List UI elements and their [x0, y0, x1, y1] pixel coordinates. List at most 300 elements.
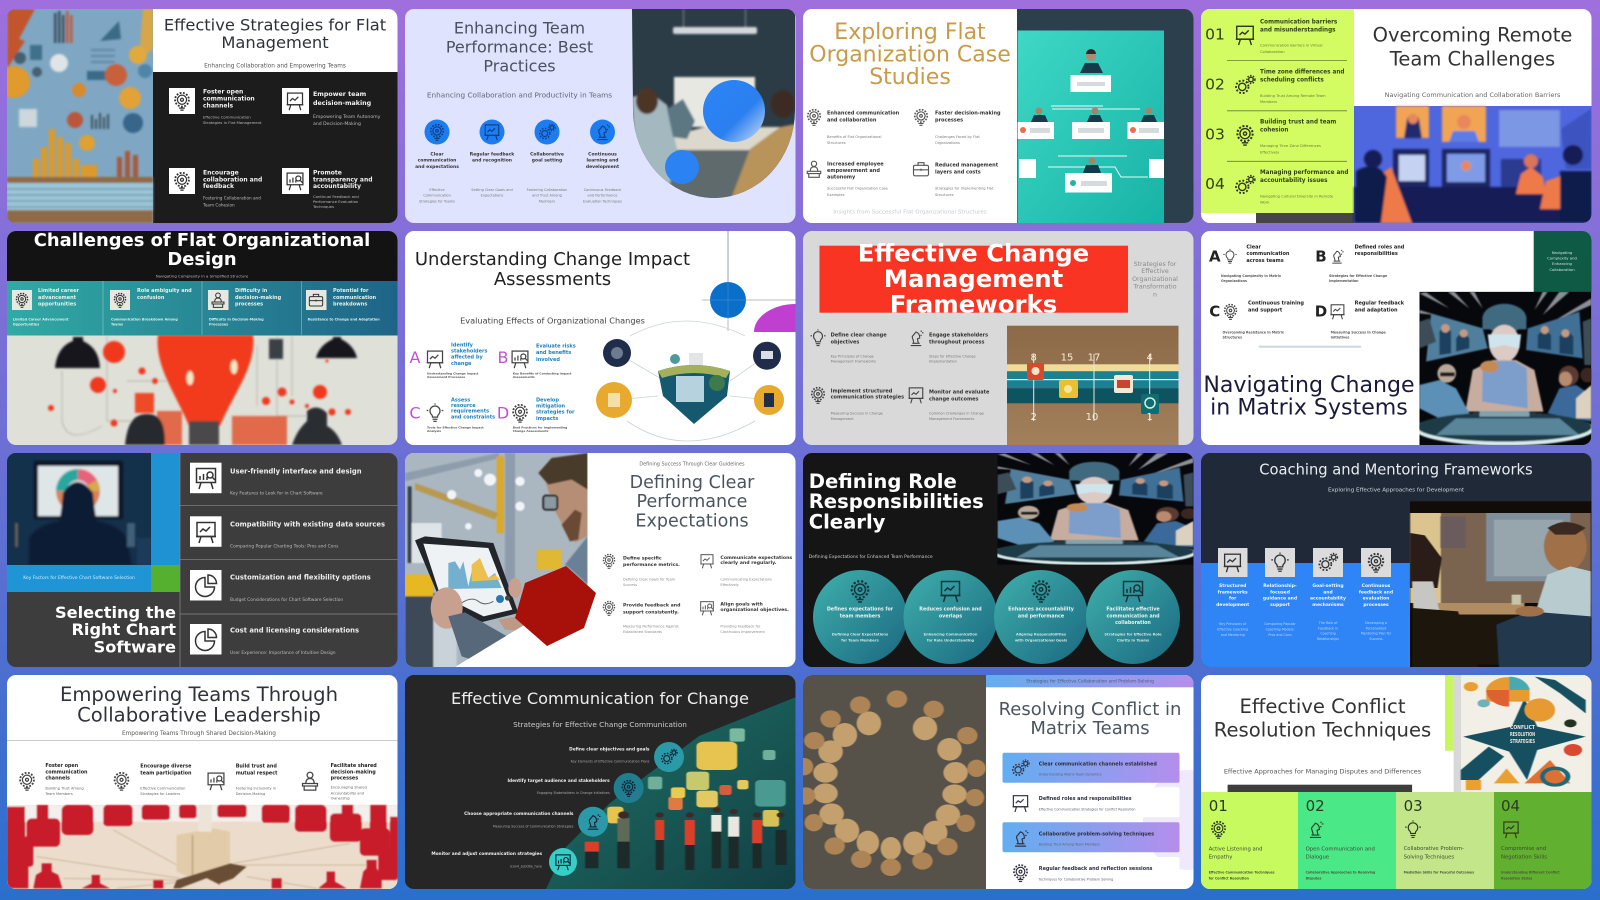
title: Performance: Best	[446, 38, 593, 56]
list text: channels	[45, 775, 70, 781]
ellipse text: and performance	[1018, 614, 1065, 620]
teal band of four columns: Communication Breakdown Among	[111, 318, 178, 322]
column text: and	[1323, 590, 1333, 596]
photo: holographic meeting	[1414, 292, 1595, 446]
subtitle: Effective Approaches for Managing Disputes and Differences	[1224, 768, 1422, 776]
subtitle: Strategies for Effective Change Communication	[513, 720, 687, 729]
timeline photo: 1	[1147, 412, 1153, 423]
list text: Decision-Making	[236, 792, 265, 796]
item text blocks: Continual Feedback and	[313, 194, 359, 199]
list text: Regular feedback	[1355, 301, 1405, 307]
title	[858, 238, 1089, 318]
title: Matrix Teams	[1030, 718, 1150, 739]
ellipse text: collaboration	[1115, 620, 1151, 626]
title: Challenges of Flat Organizational	[34, 230, 370, 251]
illustration: video call	[1354, 106, 1592, 223]
numbers	[1209, 797, 1520, 815]
column labels: development	[586, 164, 620, 170]
item text blocks: Empowering Team Autonomy	[313, 114, 381, 120]
title	[416, 252, 690, 286]
teal band of four columns: breakdowns	[333, 302, 367, 308]
item text blocks: communication	[203, 96, 255, 102]
photo: wooden pawns in a circle	[795, 675, 986, 889]
list text: impacts	[536, 416, 558, 422]
teal band of four columns: Potential for	[333, 288, 369, 294]
panel: Challenges of Flat Organizational Design	[7, 230, 398, 445]
side subtitle: Organizational	[1132, 276, 1178, 283]
list text: Key Elements of Effective Communication Plans	[571, 759, 650, 763]
icon tiles	[190, 463, 222, 654]
column labels: goal setting	[532, 158, 562, 164]
list text: Tools for Effective Change Impact	[427, 425, 484, 429]
list rows: Clear communication channels established	[1039, 761, 1157, 767]
list text: Managing Time Zone Differences	[1260, 144, 1321, 148]
item text blocks: Performance Evaluation	[313, 199, 359, 204]
column text: Coaching	[1320, 632, 1336, 636]
list text: throughout process	[929, 340, 984, 346]
dark bar	[1228, 785, 1412, 792]
item text blocks: Promote	[313, 170, 342, 176]
list text: Best Practices for Implementing	[513, 425, 567, 429]
list text: Identify target audience and stakeholders	[507, 778, 610, 784]
list text: performance metrics.	[623, 562, 680, 568]
item text: Challenges Faced by Flat	[935, 135, 980, 139]
title: Frameworks	[890, 290, 1057, 318]
panel: Selecting the Right Chart Software	[7, 453, 398, 667]
teal band of four columns: confusion	[137, 295, 165, 301]
row text: Comparing Popular Charting Tools: Pros and Cons	[230, 544, 339, 550]
title: Selecting the	[55, 603, 176, 622]
teal band of four columns: Opportunities	[13, 323, 39, 327]
list text: Building Trust Among	[45, 786, 84, 790]
column labels: Collaborative	[530, 152, 564, 158]
teal band of four columns: Processes	[209, 323, 228, 327]
list text: Managing performance and	[1260, 170, 1348, 176]
item text: Successful Flat Organization Case	[827, 186, 889, 190]
title: Exploring Flat	[834, 20, 986, 45]
column text: The Role of	[1318, 621, 1338, 625]
item text blocks: and Decision-Making	[313, 121, 361, 127]
item text blocks: feedback	[203, 183, 235, 190]
list text: Success	[623, 583, 637, 587]
title: Assessments	[494, 269, 611, 290]
list text: Provide feedback and	[623, 602, 680, 608]
list text: Work	[1260, 200, 1270, 204]
ellipse text: Defining Clear Expectations	[832, 632, 888, 636]
column text: Success	[1369, 637, 1383, 641]
item text blocks: collaboration and	[203, 176, 262, 184]
side subtitle: Strategies for	[1134, 261, 1177, 268]
column labels: Regular feedback	[470, 152, 515, 158]
column captions: and Performance	[588, 194, 617, 198]
list text: change outcomes	[929, 397, 979, 403]
item text blocks: Team Cohesion	[202, 202, 235, 208]
numbers: 02	[1306, 797, 1325, 815]
item text: Examples	[827, 193, 845, 197]
row text: Budget Considerations for Chart Software Selection	[230, 597, 343, 603]
side subtitle: Effective	[1141, 268, 1169, 275]
title: Right Chart	[71, 620, 176, 639]
ellipse text	[827, 606, 1162, 643]
list text: Overcoming Resistance in Matrix	[1222, 330, 1285, 334]
column text: Effective Coaching	[1217, 627, 1248, 631]
title	[55, 603, 176, 656]
item text blocks: Foster open	[203, 88, 243, 96]
side subtitle: n	[1153, 292, 1157, 298]
column text	[1216, 583, 1393, 641]
list text: Communicate expectations	[720, 555, 792, 561]
org chart illustration	[1017, 9, 1194, 224]
column captions: Strategies for Teams	[419, 200, 455, 204]
panel: Coaching and Mentoring Frameworks	[1201, 453, 1592, 667]
side subtitle: Transformatio	[1132, 284, 1177, 290]
list text: Communication barriers	[1260, 20, 1338, 26]
title: Effective Communication for Change	[451, 689, 749, 708]
title: Team Challenges	[1389, 48, 1555, 70]
timeline photo: 17	[1088, 352, 1100, 364]
list text: mitigation	[536, 404, 566, 410]
row text: Key Features to Look for in Chart Software	[230, 490, 323, 496]
item text: Enhanced communication	[827, 110, 900, 116]
four coloured columns: Open Communication and	[1306, 847, 1375, 853]
photo: analyst at monitor	[7, 453, 151, 565]
title: Effective Strategies for Flat	[164, 16, 386, 34]
title: Enhancing Team	[454, 18, 585, 38]
column captions: Fostering Collaboration	[527, 188, 567, 192]
list text: Change Assessments	[513, 429, 549, 433]
item text: autonomy	[827, 174, 856, 180]
list text: Ownership	[331, 797, 350, 801]
list text: Navigating Cultural Diversity in Remote	[1260, 194, 1334, 198]
column text: Feedback in	[1318, 626, 1338, 630]
decorative circle and half circle	[702, 231, 796, 332]
panel: Effective Change Management Frameworks	[803, 231, 1194, 446]
panel: Navigating Change in Matrix Systems	[1201, 231, 1595, 446]
panel: Effective Strategies for Flat Management	[0, 9, 398, 223]
subtitle: Evaluating Effects of Organizational Changes	[460, 316, 645, 326]
numbers: 03	[1205, 126, 1225, 144]
column text: Mentoring Plan for	[1361, 632, 1392, 636]
list text: Implement structured	[831, 389, 893, 395]
list text: Key Benefits of Conducting Impact	[513, 371, 572, 375]
column text: Coaching Models:	[1265, 627, 1295, 631]
panel: Understanding Change Impact Assessments	[405, 231, 796, 445]
list text: Steps for Effective Change	[929, 354, 976, 358]
item text: Reduced management	[935, 162, 999, 168]
column text: for	[1229, 596, 1237, 602]
icons	[20, 772, 317, 790]
numbers: 04	[1501, 797, 1520, 815]
title	[60, 683, 338, 726]
poster illustration: STRATEGIES	[1510, 739, 1535, 745]
icons	[603, 554, 714, 615]
list text: Organizations	[1221, 279, 1247, 283]
timeline photo: 4	[1147, 352, 1153, 364]
title	[165, 18, 386, 52]
column text: guidance and	[1263, 596, 1297, 602]
list text: Choose appropriate communication channels	[464, 811, 574, 817]
column labels: learning and	[586, 158, 619, 164]
column text: Key Principles of	[1219, 622, 1247, 626]
column text: processes	[1363, 602, 1389, 608]
title: Management	[884, 264, 1064, 293]
list text: support consistently.	[623, 610, 679, 616]
column captions	[419, 188, 622, 204]
title: Defining Clear	[630, 473, 755, 493]
letters: C	[1209, 303, 1220, 321]
four coloured columns: Active Listening and	[1209, 847, 1262, 853]
item text blocks: transparency and	[313, 176, 373, 184]
item text blocks: Empower team	[313, 91, 367, 98]
four coloured columns: Compromise and	[1501, 846, 1546, 852]
row text: Cost and licensing considerations	[230, 627, 359, 635]
title	[809, 470, 984, 534]
title: Expectations	[635, 511, 749, 531]
column captions: Communication	[423, 194, 451, 198]
item text blocks: channels	[203, 102, 234, 110]
list text: Communication Barriers in Virtual	[1260, 43, 1322, 47]
ellipse text: Enhancing Communication	[924, 632, 978, 636]
numbers	[1206, 28, 1224, 189]
list text	[44, 763, 377, 801]
list text: Key Principles of Change	[831, 354, 874, 358]
item text: Structures	[935, 193, 954, 197]
column labels: communication	[418, 158, 456, 164]
list text	[1221, 244, 1405, 339]
numbers: 01	[1209, 797, 1228, 815]
icons	[1223, 249, 1345, 319]
list text: Evaluate risks	[536, 344, 576, 350]
list text: Communicating Expectations	[720, 577, 772, 581]
letters: D	[497, 404, 509, 422]
list text: Established Standards	[623, 630, 662, 634]
four coloured columns: Empathy	[1209, 855, 1232, 861]
subtitle: Enhancing Collaboration and Empowering Teams	[204, 64, 346, 70]
teal diagonal with speech bubbles and people	[546, 697, 796, 889]
list text: Continuous training	[1248, 301, 1304, 307]
ellipse text: Clarity in Teams	[1117, 639, 1149, 643]
column text: focused	[1270, 590, 1290, 596]
item text: processes	[935, 118, 963, 124]
item text: Benefits of Flat Organizational	[827, 135, 881, 139]
list text: Fostering Inclusivity in	[236, 786, 276, 790]
list text: team participation	[140, 771, 192, 777]
title	[447, 22, 593, 72]
title: Effective Change	[858, 238, 1089, 268]
panel: Resolving Conflict in Matrix Teams	[795, 675, 1233, 889]
list text: and support	[1248, 307, 1283, 313]
title: Overcoming Remote	[1373, 24, 1572, 46]
item text: Strategies for Implementing Flat	[935, 186, 994, 190]
photo: red pawns around a central block	[7, 805, 398, 890]
list text: Structures	[1222, 335, 1242, 339]
four coloured columns: Solving Techniques	[1404, 854, 1454, 860]
poster illustration: RESOLUTION	[1510, 732, 1535, 738]
ellipse text: Reduces confusion and	[919, 606, 982, 612]
header band	[7, 230, 398, 281]
subtitle: Navigating Communication and Collaboration Barriers	[1385, 91, 1561, 99]
list text: Management Frameworks	[929, 417, 975, 421]
column text: Personalized	[1366, 626, 1386, 630]
top band	[986, 675, 1194, 687]
list text: communication	[1246, 251, 1290, 257]
column labels	[415, 152, 620, 170]
blue panel	[1201, 563, 1410, 667]
list text	[831, 333, 990, 421]
icons	[807, 110, 928, 177]
title: Coaching and Mentoring Frameworks	[1259, 462, 1533, 478]
letters: A	[410, 348, 421, 367]
list text: Analysis	[427, 429, 441, 433]
list text: and constraints	[451, 414, 495, 420]
list text: Implementation	[1329, 279, 1359, 283]
title: Practices	[483, 56, 556, 76]
ellipse text: Defines expectations for	[827, 606, 894, 612]
list text: Measuring Success in Change	[1331, 330, 1387, 334]
ellipse text: team members	[840, 614, 880, 620]
photo: blue wall with chart objects and keyboard	[0, 9, 153, 223]
title: Navigating Change	[1203, 372, 1415, 398]
list text: Effective Communication	[140, 786, 185, 790]
four coloured columns: Disputes	[1306, 876, 1321, 880]
list text: change	[451, 361, 472, 367]
item text: layers and costs	[935, 170, 981, 176]
list text: Define clear objectives and goals	[569, 746, 650, 752]
list text: accountability issues	[1260, 178, 1328, 184]
list text: clearly and regularly.	[720, 560, 777, 566]
list text: and benefits	[536, 350, 571, 356]
list text: Align goals with	[720, 602, 763, 608]
column labels: and recognition	[472, 158, 512, 164]
list text: Accountability and	[331, 791, 364, 795]
four coloured columns	[1201, 792, 1592, 889]
list text: Collaboration	[1260, 50, 1285, 54]
column captions: Members	[539, 200, 555, 204]
list text: mutual respect	[236, 771, 278, 777]
letters: A	[1209, 248, 1221, 266]
title: Defining Role	[809, 470, 957, 493]
panel: Exploring Flat Organization Case Studies	[803, 9, 1194, 224]
list text: Encourage diverse	[140, 764, 192, 770]
ellipse text: Strategies for Effective Role	[1104, 632, 1162, 636]
list text: Measuring Success in Change	[831, 412, 883, 416]
icon circles	[424, 120, 615, 144]
title: Empowering Teams Through	[60, 683, 338, 706]
column captions: Continuous Feedback	[584, 188, 622, 192]
photo: meeting room in oval crop	[632, 9, 796, 200]
photo: mentoring conversation	[1410, 501, 1592, 667]
teal ellipses	[813, 570, 1180, 664]
letters: D	[1315, 303, 1327, 321]
column text: and Mentoring	[1221, 633, 1245, 637]
list text: responsibilities	[1355, 251, 1398, 257]
column text: accountability	[1310, 596, 1346, 602]
icons	[427, 351, 528, 422]
list text: Building trust and team	[1260, 120, 1336, 126]
four coloured columns: Effective Communication Techniques	[1209, 870, 1275, 874]
numbers: 03	[1404, 797, 1423, 815]
list text: icon4_subtitle_here	[510, 865, 542, 869]
teal band of four columns: Difficulty in	[235, 288, 268, 294]
list text: organizational objectives.	[720, 607, 789, 613]
icon tiles	[12, 290, 326, 310]
column text: Goal-setting	[1312, 583, 1344, 589]
green corner block: Complexity and	[1547, 256, 1577, 260]
column captions: Setting Clear Goals and	[471, 188, 513, 192]
list text: Measuring Performance Against	[623, 625, 679, 629]
teal band of four columns: opportunities	[38, 302, 76, 308]
title: Collaborative Leadership	[77, 704, 321, 726]
four coloured columns: Understanding Different Conflict	[1501, 870, 1560, 874]
list rows: Collaborative problem-solving techniques	[1039, 831, 1154, 837]
list rows	[1002, 753, 1180, 887]
item text blocks	[202, 88, 381, 209]
teal band of four columns: Resistance to Change and Adaptation	[308, 318, 380, 322]
list text: Common Challenges in Change	[929, 412, 984, 416]
hub diagram	[596, 321, 784, 441]
list rows: Techniques for Collaborative Problem Solving	[1038, 878, 1113, 882]
top band: Strategies for Effective Collaboration and Problem-Solving	[1026, 678, 1154, 684]
list rows: Understanding Matrix Team Dynamics	[1039, 773, 1102, 777]
column text: Continuous	[1362, 583, 1391, 589]
title	[1214, 695, 1431, 742]
subtitle: Defining Expectations for Enhanced Team Performance	[809, 554, 933, 560]
subtitle: Enhancing Collaboration and Productivity in Teams	[427, 90, 612, 100]
list text: strategies for	[536, 410, 575, 416]
list text: requirements	[451, 409, 489, 415]
timeline photo	[1007, 326, 1178, 446]
four coloured columns: Mediation Skills for Peaceful Outcomes	[1404, 870, 1474, 874]
column text: frameworks	[1218, 590, 1248, 596]
green corner block	[1534, 231, 1592, 292]
green corner block: Navigating	[1552, 250, 1573, 255]
title: Clearly	[809, 510, 886, 534]
list rows: Building Trust Among Team Members	[1039, 843, 1100, 847]
numbers: 04	[1205, 175, 1225, 193]
list text: across teams	[1246, 258, 1284, 264]
panel: Empowering Teams Through Collaborative Leadership	[7, 675, 398, 890]
list text: Management Frameworks	[831, 360, 876, 364]
teal band of four columns: Limited Career Advancement	[13, 318, 69, 322]
column text: Developing a	[1365, 621, 1387, 625]
title	[1203, 372, 1415, 421]
column captions: and Trust Among	[532, 194, 562, 198]
item text: Structures	[827, 141, 846, 145]
title: in Matrix Systems	[1210, 395, 1408, 421]
four coloured columns: Resolution Styles	[1501, 876, 1532, 880]
title: Organization Case	[809, 42, 1011, 68]
photo: engineer with tablet	[405, 453, 588, 668]
red title box	[820, 238, 1128, 318]
letters	[409, 348, 509, 422]
title: Resolution Techniques	[1214, 718, 1431, 742]
ellipse text: Aligning Responsibilities	[1016, 632, 1066, 636]
panel: Defining Role Responsibilities Clearly	[803, 453, 1198, 667]
item text: Faster decision-making	[935, 110, 1001, 116]
teal band of four columns	[7, 281, 398, 336]
list text: Facilitate shared	[331, 763, 377, 769]
list text: Defining Clear Goals for Team	[623, 577, 676, 581]
panel: Defining Clear Performance Expectations	[405, 453, 796, 668]
panel: Effective Conflict Resolution Techniques	[1201, 675, 1592, 889]
item text	[827, 110, 1001, 197]
row text: Compatibility with existing data sources	[230, 520, 385, 528]
letters	[1209, 248, 1327, 321]
decorative circles	[665, 80, 765, 184]
list text: Continuous Improvement	[720, 630, 765, 634]
teal circles with icons	[549, 742, 684, 876]
ellipse text: for Role Understanding	[927, 639, 975, 643]
